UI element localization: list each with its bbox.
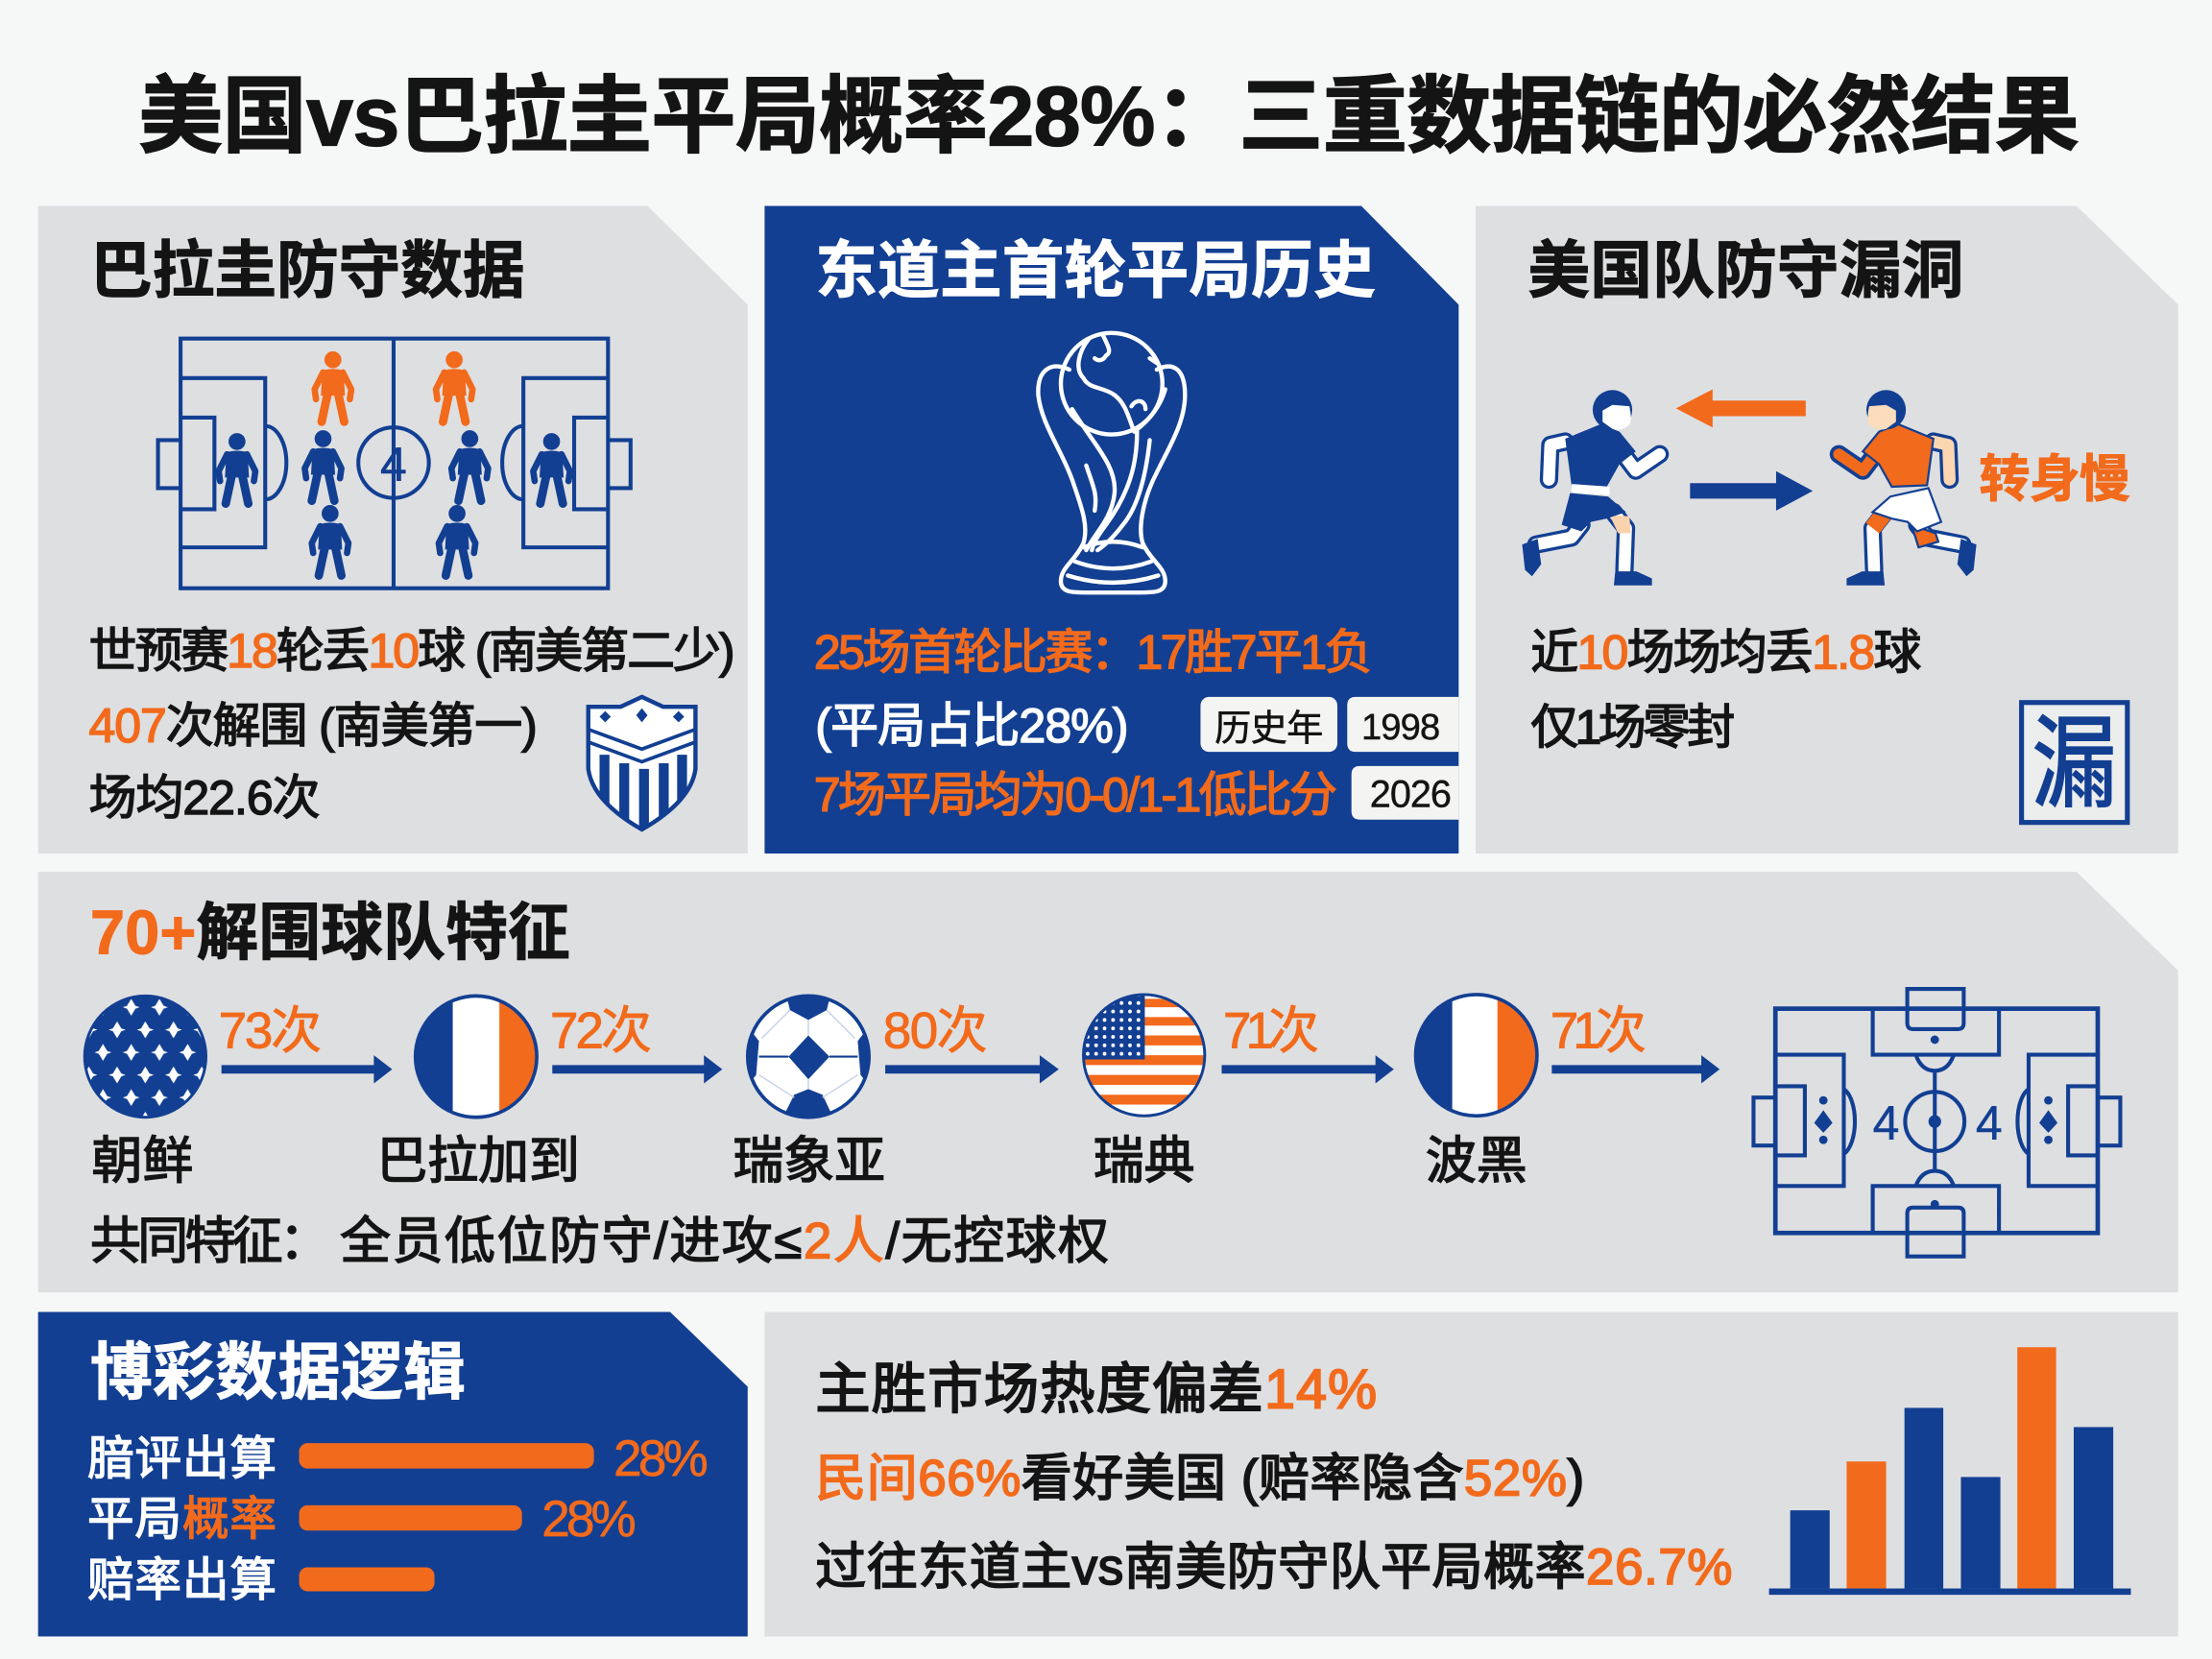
row: 赔率出算: 赔率出算 [87,1554,276,1606]
text: 场均丢球: 近10场场均丢1.8球 [1530,625,1921,679]
arrow [552,1055,722,1083]
icon: 瑞象亚 football [745,988,872,1121]
panel: 主胜市场热度偏差 [764,1312,2178,1636]
text: 共同特征: 全员低位防守/进攻≤2人/无控球权 [340,1214,1109,1270]
arrow [885,1055,1059,1083]
count: 80次: 80次 [883,1003,988,1060]
title: 美国vs巴拉圭平局概率28%：三重数据链的必然结果 [138,68,2080,163]
icon: 朝鲜 flag [83,995,207,1119]
heading: 博彩数据逻辑: 博彩数据逻辑 [90,1337,466,1407]
formation numbers [1873,1096,2003,1150]
arrow [1221,1055,1394,1083]
text: 零封: 仅1场零封 [1530,700,1735,754]
arrow: orange left [1676,390,1806,427]
text: 首轮战绩: 25场首轮比赛：17胜7平1负 [814,625,1373,679]
arrow [1551,1055,1719,1083]
count: 72次: 72次 [550,1003,652,1060]
count: 71次: 71次 [1551,1003,1647,1060]
heading: 主胜市场热度偏差14%: 主胜市场热度偏差14% [815,1358,1377,1420]
name: 巴拉加到: 巴拉加到 [376,1133,580,1190]
panel: 博彩数据逻辑 [38,1312,748,1636]
heading: 东道主首轮平局历史: 东道主首轮平局历史 [815,235,1376,305]
callout: 转身慢: 转身慢 [1980,451,2130,508]
name: 波黑: 波黑 [1426,1133,1527,1190]
heading: 70+解围球队特征: 70+解围球队特征 [90,897,570,967]
tag: 历史年 [1200,697,1337,752]
icon: world cup trophy [1038,333,1185,592]
panel: 东道主首轮平局历史 [764,206,1458,854]
name: 朝鲜: 朝鲜 [92,1133,193,1190]
row: 平局概率 [87,1491,637,1548]
icon: 漏 seal: 漏 [2032,709,2117,820]
heading: 巴拉圭防守数据: 巴拉圭防守数据 [90,235,525,305]
icon: orange runner [1839,390,1977,586]
name: 瑞象亚: 瑞象亚 [733,1133,885,1190]
heading: 美国队防守漏洞: 美国队防守漏洞 [1527,235,1963,305]
tag: 1998 [1347,697,1458,752]
formation numbers: 4 [1873,1096,1899,1150]
panel: 70+解围球队特征 [38,872,2178,1292]
text: 解围数据: 407次解围 (南美第一) [89,699,538,753]
row: 赔率出算 [87,1554,435,1606]
text: 世预赛数据: 世预赛18轮丢10球 (南美第二少) [89,624,735,678]
tag: 1998: 1998 [1361,707,1440,748]
row: 平局概率: 平局概率 [87,1494,276,1546]
text: 民间看好: 民间66%看好美国 (赔率隐含52%) [815,1451,1584,1507]
text: 平局比分: 7场平局均为0-0/1-1低比分 [814,768,1337,822]
icon: shield crest [589,697,695,839]
icon: 波黑 flag [1413,993,1539,1118]
icon: navy runner [1522,390,1660,586]
bar chart [1769,1347,2131,1595]
players: orange forwards [315,352,472,421]
formation number 4: 4 [380,438,407,492]
formation numbers: 4 [1976,1096,2003,1150]
tag: 2026: 2026 [1370,773,1452,815]
icon: 瑞典 flag [1082,993,1206,1118]
text: 平局占比: (平局占比28%) [815,699,1129,753]
count: 73次: 73次 [219,1003,322,1060]
text: 过往概率: 过往东道主vs南美防守队平局概率26.7% [815,1539,1732,1596]
pitch: low block formation [1753,989,2120,1257]
arrow [222,1055,392,1083]
text: 场均: 场均22.6次 [89,771,321,825]
name: 瑞典: 瑞典 [1094,1133,1195,1190]
pitch with 4-4 formation [158,339,631,589]
row: 平局概率: 28% [541,1491,637,1548]
tag: 历史年: 历史年 [1214,708,1323,749]
row: 腤评出算: 腤评出算 [87,1433,276,1485]
icon: 巴拉加到 flag [413,995,539,1119]
row: 腤评出算 [87,1431,709,1487]
panel: 美国队防守漏洞 [1476,206,2178,854]
arrow: navy right [1690,471,1813,511]
count: 71次: 71次 [1223,1003,1319,1060]
panel: 巴拉圭防守数据 [38,206,748,854]
players: navy defenders [219,431,570,576]
row: 腤评出算: 28% [613,1431,709,1487]
tag: 2026 [1352,766,1458,820]
text: 共同特征: 共同特征： [90,1214,330,1270]
